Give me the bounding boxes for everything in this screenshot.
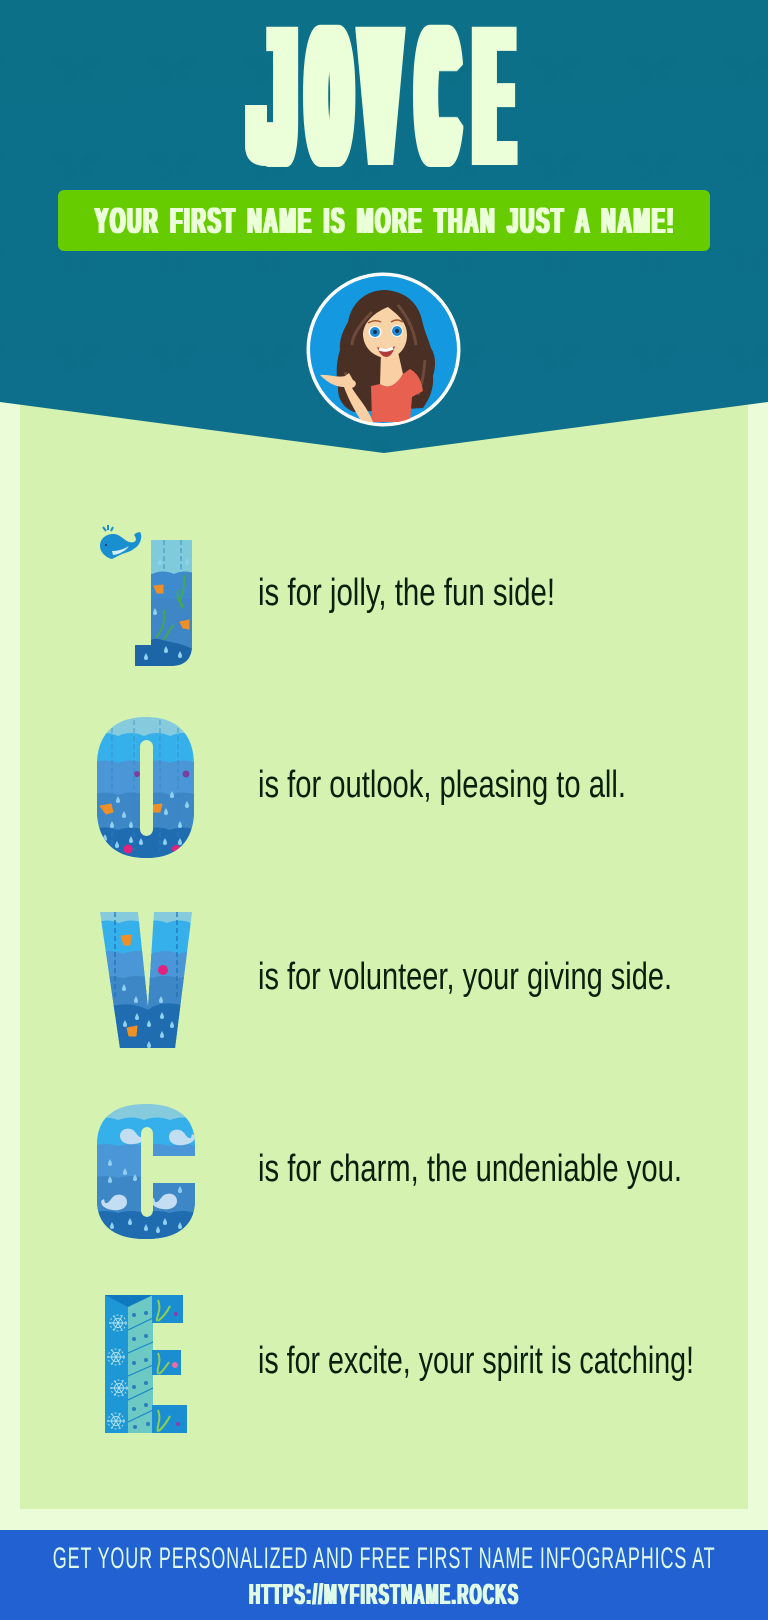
letter E	[105, 1295, 187, 1433]
letter J	[135, 540, 192, 666]
letter row J	[100, 525, 192, 666]
header banner	[0, 0, 768, 453]
row text: J: is for jolly, the fun side!	[258, 572, 555, 614]
icon: whale	[100, 525, 141, 559]
icon: woman avatar	[306, 272, 460, 426]
letter O	[97, 717, 194, 858]
footer	[0, 1530, 768, 1620]
content panel	[20, 395, 748, 1509]
subtitle banner: YOUR FIRST NAME IS MORE THAN JUST A NAME!	[95, 202, 673, 242]
footer: HTTPS://MYFIRSTNAME.ROCKS	[249, 1578, 518, 1610]
letter V	[100, 912, 192, 1048]
letter C	[97, 1104, 195, 1239]
row text: O: is for outlook, pleasing to all.	[258, 764, 626, 806]
footer: GET YOUR PERSONALIZED AND FREE FIRST NAME INFOGRAPHICS AT	[53, 1543, 715, 1575]
subtitle banner	[58, 190, 710, 251]
